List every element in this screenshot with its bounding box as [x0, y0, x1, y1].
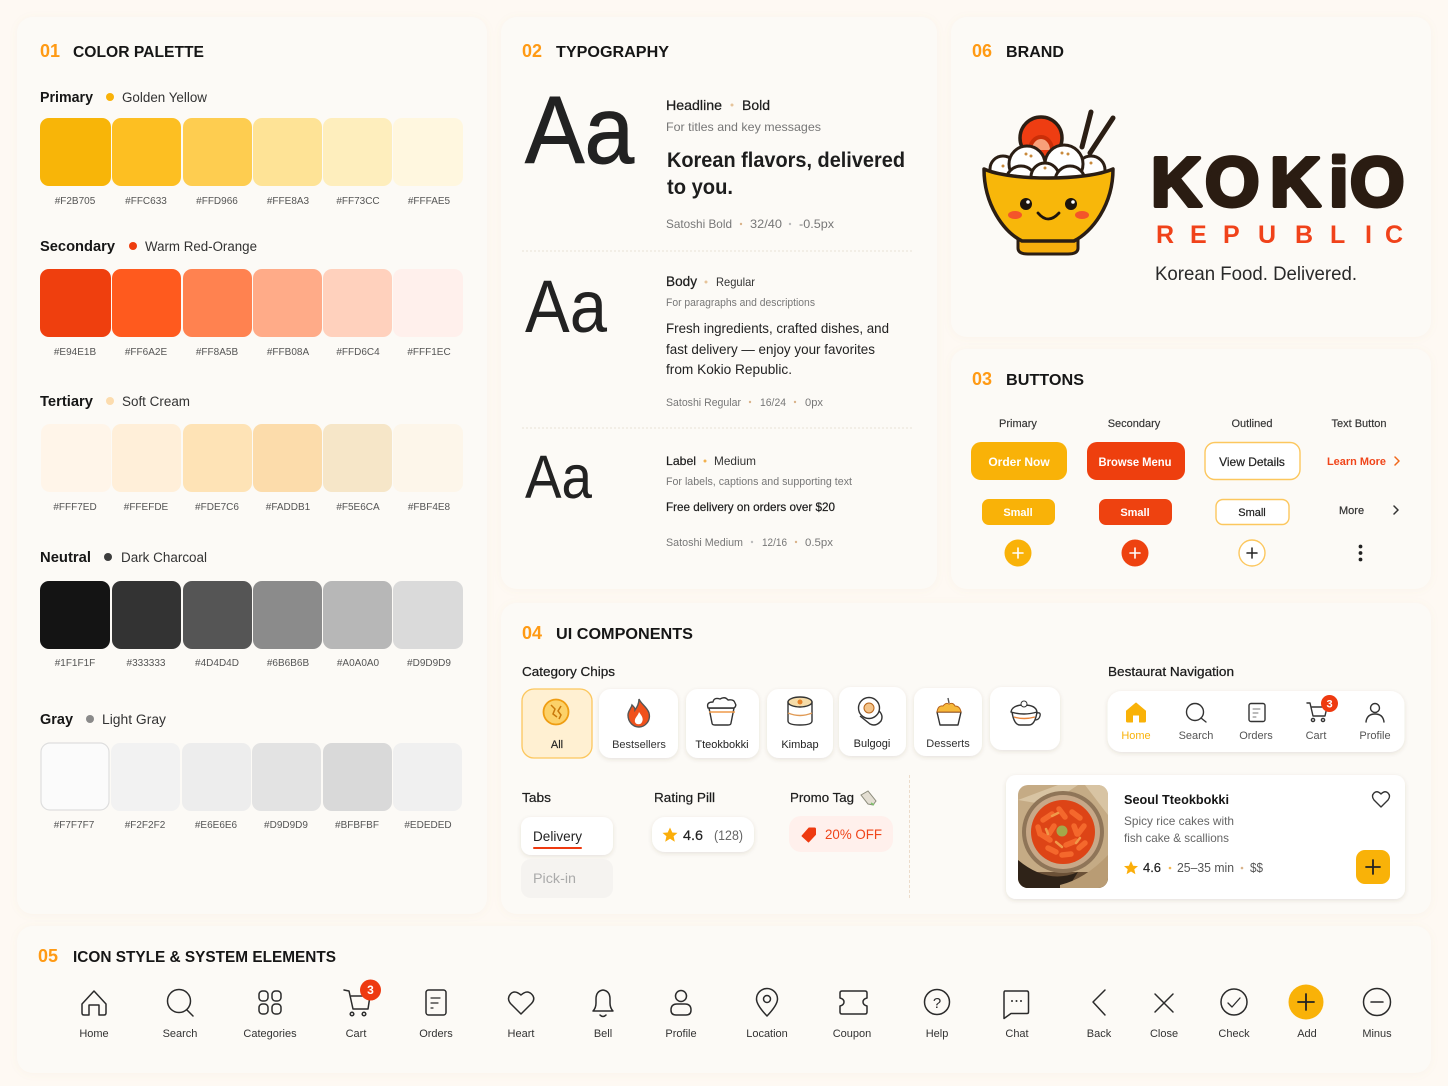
swatch row: primary: #FFFAE5	[408, 196, 451, 207]
nav item: cart: 3	[1326, 698, 1333, 710]
palette label: primary	[40, 90, 207, 106]
icon: categories	[243, 991, 297, 1040]
nav item: search	[1179, 704, 1213, 742]
swatch row: gray	[41, 743, 462, 831]
palette label: tertiary: Soft Cream	[122, 394, 190, 409]
swatch row: secondary: #FFD6C4	[336, 347, 380, 358]
chip: bestsellers	[599, 689, 678, 758]
swatch row: neutral: #A0A0A0	[337, 658, 380, 669]
type block: label: Label	[666, 454, 696, 468]
small button: primary	[982, 499, 1055, 525]
button: browse menu	[1087, 442, 1185, 480]
type block: headline: Satoshi Bold	[666, 217, 732, 231]
icon: cart: 3	[367, 983, 374, 997]
rating pill	[652, 790, 754, 852]
subheading: category chips: Category Chips	[522, 664, 616, 679]
type block: label: 0.5px	[805, 537, 834, 549]
tagline: Korean Food. Delivered.	[1155, 263, 1357, 285]
icon: orders	[419, 990, 453, 1040]
nav item: home	[1121, 703, 1151, 742]
food photo	[1018, 785, 1108, 888]
rating pill: Rating Pill	[654, 790, 715, 805]
icon button: outlined plus	[1239, 540, 1265, 566]
icon: location	[746, 989, 788, 1040]
palette label: secondary: Secondary	[40, 239, 115, 255]
swatch row: tertiary: #FFEFDE	[124, 502, 169, 513]
heading: brand: 06	[972, 41, 992, 61]
swatch row: gray: #D9D9D9	[264, 820, 308, 831]
icon: heart	[508, 992, 534, 1040]
icon: cart: Cart	[346, 1028, 366, 1040]
icon: categories: Categories	[243, 1028, 297, 1040]
icon button: secondary plus	[1122, 540, 1148, 566]
chip: all: All	[551, 739, 563, 751]
swatch row: tertiary: #F5E6CA	[336, 502, 380, 513]
tabs	[521, 790, 613, 898]
type specimen: body Aa: Aa	[525, 265, 608, 348]
icon: home: Home	[79, 1028, 109, 1040]
heading: buttons: BUTTONS	[1006, 372, 1084, 389]
type block: body: Body	[666, 273, 697, 289]
icon: minus: Minus	[1362, 1028, 1392, 1040]
type block: body: from Kokio Republic.	[666, 361, 792, 377]
type block: body: Satoshi Regular	[666, 397, 741, 409]
tabs: Delivery	[533, 828, 582, 844]
type block: body: For paragraphs and descriptions	[666, 297, 815, 309]
chip: tteokbokki	[686, 689, 759, 758]
chip: all	[522, 689, 592, 758]
food card	[1006, 775, 1405, 899]
type block: headline: -0.5px	[799, 217, 834, 231]
palette label: gray: Gray	[40, 712, 73, 728]
food card: 25–35 min	[1177, 860, 1234, 875]
nav item: cart	[1306, 695, 1338, 742]
heading: buttons: 03	[972, 369, 992, 389]
icon: home	[79, 991, 109, 1040]
rating pill: 4.6	[683, 827, 703, 843]
type block: body	[666, 273, 889, 409]
heading: color palette: COLOR PALETTE	[73, 44, 204, 61]
promo tag	[789, 790, 893, 852]
panel: brand	[951, 17, 1431, 337]
icon: heart: Heart	[508, 1028, 534, 1040]
chip: bulgogi: Bulgogi	[854, 738, 890, 750]
palette label: neutral: Neutral	[40, 550, 91, 566]
heading: UI components	[522, 623, 693, 643]
chip: kimbap: Kimbap	[781, 739, 819, 751]
small button: secondary: Small	[1120, 507, 1150, 519]
chip: soup	[990, 687, 1060, 750]
swatch row: primary: #FFE8A3	[267, 196, 310, 207]
swatch row: primary: #FFD966	[196, 196, 238, 207]
food card: Spicy rice cakes with	[1124, 814, 1234, 828]
swatch row: tertiary	[41, 424, 463, 513]
heading: color palette: 01	[40, 41, 60, 61]
nav item: cart: Cart	[1306, 730, 1326, 742]
icon: bell	[593, 990, 613, 1040]
panel: icon style and system elements	[17, 926, 1431, 1073]
icon: cart	[344, 980, 381, 1040]
swatch row: gray: #BFBFBF	[335, 820, 379, 831]
column labels: Outlined	[1232, 418, 1272, 430]
palette label: gray: Light Gray	[102, 712, 166, 727]
swatch row: neutral: #4D4D4D	[195, 658, 239, 669]
nav item: orders: Orders	[1239, 730, 1273, 742]
type block: headline: Headline	[666, 97, 722, 113]
icon: location: Location	[746, 1028, 788, 1040]
swatch row: tertiary: #FBF4E8	[408, 502, 451, 513]
small button: outlined: Small	[1238, 507, 1266, 519]
subheading: restaurant navigation: Bestaurat Navigation	[1108, 664, 1234, 679]
small button: secondary	[1099, 499, 1172, 525]
button: browse menu: Browse Menu	[1098, 455, 1172, 469]
add button	[1356, 850, 1390, 884]
icon: chat	[1004, 991, 1029, 1040]
palette label: secondary	[40, 239, 257, 255]
palette label: primary: Golden Yellow	[122, 90, 207, 105]
type block: headline: For titles and key messages	[666, 120, 821, 134]
icon: close: Close	[1150, 1028, 1178, 1040]
heading: icon style: 05	[38, 946, 58, 966]
type block: body: Fresh ingredients, crafted dishes, and	[666, 320, 889, 336]
food card: $$	[1250, 860, 1264, 875]
palette label: gray	[40, 712, 166, 728]
type block: headline	[666, 97, 905, 231]
icon: check: Check	[1218, 1028, 1250, 1040]
palette label: neutral	[40, 550, 207, 566]
chip: kimbap	[767, 689, 833, 758]
type block: headline: to you.	[667, 175, 733, 199]
heading: brand	[972, 41, 1064, 61]
swatch row: tertiary: #FFF7ED	[53, 502, 97, 513]
tabs: Tabs	[522, 790, 552, 805]
swatch row: tertiary: #FDE7C6	[195, 502, 239, 513]
swatch row: neutral: #D9D9D9	[407, 658, 451, 669]
text button: more	[1339, 505, 1398, 517]
swatch row: secondary: #FF8A5B	[196, 347, 238, 358]
button: view details	[1205, 442, 1300, 480]
swatch row: neutral: #6B6B6B	[267, 658, 309, 669]
food card: Seoul Tteokbokki	[1124, 792, 1229, 807]
nav item: home: Home	[1121, 730, 1151, 742]
text button: learn more: Learn More	[1327, 456, 1386, 468]
icon: chat: Chat	[1005, 1028, 1029, 1040]
swatch row: secondary: #FFF1EC	[407, 347, 451, 358]
swatch row: secondary: #E94E1B	[54, 347, 96, 358]
icon: add: Add	[1297, 1028, 1317, 1040]
palette label: tertiary	[40, 394, 190, 410]
icon: coupon	[833, 991, 871, 1040]
icon: back: Back	[1087, 1028, 1112, 1040]
swatch row: neutral	[40, 581, 463, 669]
chip: bulgogi	[839, 687, 906, 756]
food card: 4.6	[1143, 860, 1161, 875]
small button: primary: Small	[1003, 507, 1033, 519]
promo tag: 20% OFF	[825, 826, 882, 842]
button: view details: View Details	[1219, 455, 1285, 469]
icon: back	[1087, 990, 1112, 1040]
type block: label: For labels, captions and supporting text	[666, 476, 852, 488]
type block: body: Regular	[716, 275, 755, 289]
icon: coupon: Coupon	[833, 1028, 871, 1040]
swatch row: primary	[40, 118, 463, 207]
button: order now: Order Now	[988, 455, 1050, 469]
swatch row: secondary: #FFB08A	[267, 347, 309, 358]
column labels: Text Button	[1331, 418, 1387, 430]
column labels: Secondary	[1108, 418, 1161, 430]
chip: bestsellers: Bestsellers	[612, 739, 666, 751]
palette label: primary: Primary	[40, 90, 93, 106]
type block: label: Free delivery on orders over $20	[666, 500, 835, 514]
swatch row: gray: #E6E6E6	[195, 820, 238, 831]
heading: color palette	[40, 41, 204, 61]
logo wordmark: KOKiO	[1151, 143, 1404, 221]
column labels: Primary	[999, 418, 1037, 430]
palette label: secondary: Warm Red-Orange	[145, 239, 257, 254]
rating pill: (128)	[714, 827, 743, 843]
logo: bowl mascot	[984, 112, 1113, 254]
swatch row: gray: #F7F7F7	[54, 820, 95, 831]
swatch row: neutral: #333333	[127, 658, 166, 669]
heading: typography: TYPOGRAPHY	[556, 44, 669, 61]
nav item: profile: Profile	[1359, 730, 1391, 742]
button: order now	[971, 442, 1067, 480]
heading: buttons	[972, 369, 1084, 389]
small button: outlined	[1216, 500, 1289, 524]
swatch row: secondary: #FF6A2E	[125, 347, 167, 358]
icon: check	[1218, 989, 1250, 1040]
icon: profile: Profile	[665, 1028, 697, 1040]
swatch row: secondary	[40, 269, 463, 358]
heading: typography	[522, 41, 669, 61]
panel: buttons	[951, 349, 1431, 589]
icon: profile	[665, 990, 697, 1040]
type block: label: 12/16	[762, 537, 787, 549]
icon: help	[924, 990, 950, 1040]
panel: color palette	[17, 17, 487, 914]
icon: orders: Orders	[419, 1028, 453, 1040]
type specimen: headline Aa: Aa	[525, 77, 635, 184]
swatch row: primary: #FFC633	[125, 196, 167, 207]
text button: more: More	[1339, 505, 1364, 517]
type block: headline: Bold	[742, 97, 770, 113]
type block: body: 0px	[805, 397, 823, 409]
type block: body: fast delivery — enjoy your favorites	[666, 341, 875, 357]
swatch row: primary: #FF73CC	[336, 196, 380, 207]
nav item: profile	[1359, 704, 1391, 742]
nav item: orders	[1239, 704, 1273, 742]
promo tag: Promo Tag	[790, 790, 854, 805]
logo wordmark: REPUBLIC	[1156, 221, 1403, 249]
swatch row: neutral: #1F1F1F	[55, 658, 95, 669]
swatch row: gray: #F2F2F2	[125, 820, 166, 831]
nav item: search: Search	[1179, 730, 1213, 742]
column labels	[999, 418, 1387, 430]
tabs: Pick-in	[533, 870, 576, 886]
chip: tteokbokki: Tteokbokki	[695, 739, 749, 751]
heading: icon style: ICON STYLE & SYSTEM ELEMENTS	[73, 949, 336, 966]
chip: desserts: Desserts	[926, 738, 970, 750]
heading: typography: 02	[522, 41, 542, 61]
heading: UI components: UI COMPONENTS	[556, 626, 693, 643]
type block: label: Satoshi Medium	[666, 537, 743, 549]
heading: brand: BRAND	[1006, 44, 1064, 61]
heading: UI components: 04	[522, 623, 542, 643]
swatch row: tertiary: #FADDB1	[266, 502, 311, 513]
icon: search: Search	[163, 1028, 197, 1040]
chip: desserts	[914, 688, 982, 756]
icon: close	[1150, 994, 1178, 1040]
icon: heart	[1372, 792, 1390, 807]
icon: search	[163, 990, 197, 1040]
icon: help: Help	[926, 1028, 948, 1040]
icon: minus	[1362, 988, 1392, 1040]
swatch row: primary: #F2B705	[55, 196, 96, 207]
icon: help: ?	[933, 995, 941, 1012]
type block: label: Medium	[714, 454, 756, 468]
palette label: tertiary: Tertiary	[40, 394, 93, 410]
icon: add	[1288, 984, 1324, 1040]
icon button: more dots	[1359, 545, 1362, 561]
type block: headline: 32/40	[750, 217, 782, 231]
panel: UI components	[520, 626, 1406, 902]
type block: label	[666, 454, 852, 549]
icon: bell: Bell	[594, 1028, 612, 1040]
bottom navigation	[1108, 691, 1404, 752]
icon button: primary plus	[1004, 540, 1032, 566]
type block: headline: Korean flavors, delivered	[667, 148, 905, 172]
type block: body: 16/24	[760, 397, 786, 409]
type specimen: label Aa: Aa	[525, 443, 592, 511]
swatch row: gray: #EDEDED	[404, 820, 452, 831]
food card: fish cake & scallions	[1124, 831, 1229, 845]
panel: typography	[501, 17, 937, 589]
palette label: neutral: Dark Charcoal	[121, 550, 207, 565]
